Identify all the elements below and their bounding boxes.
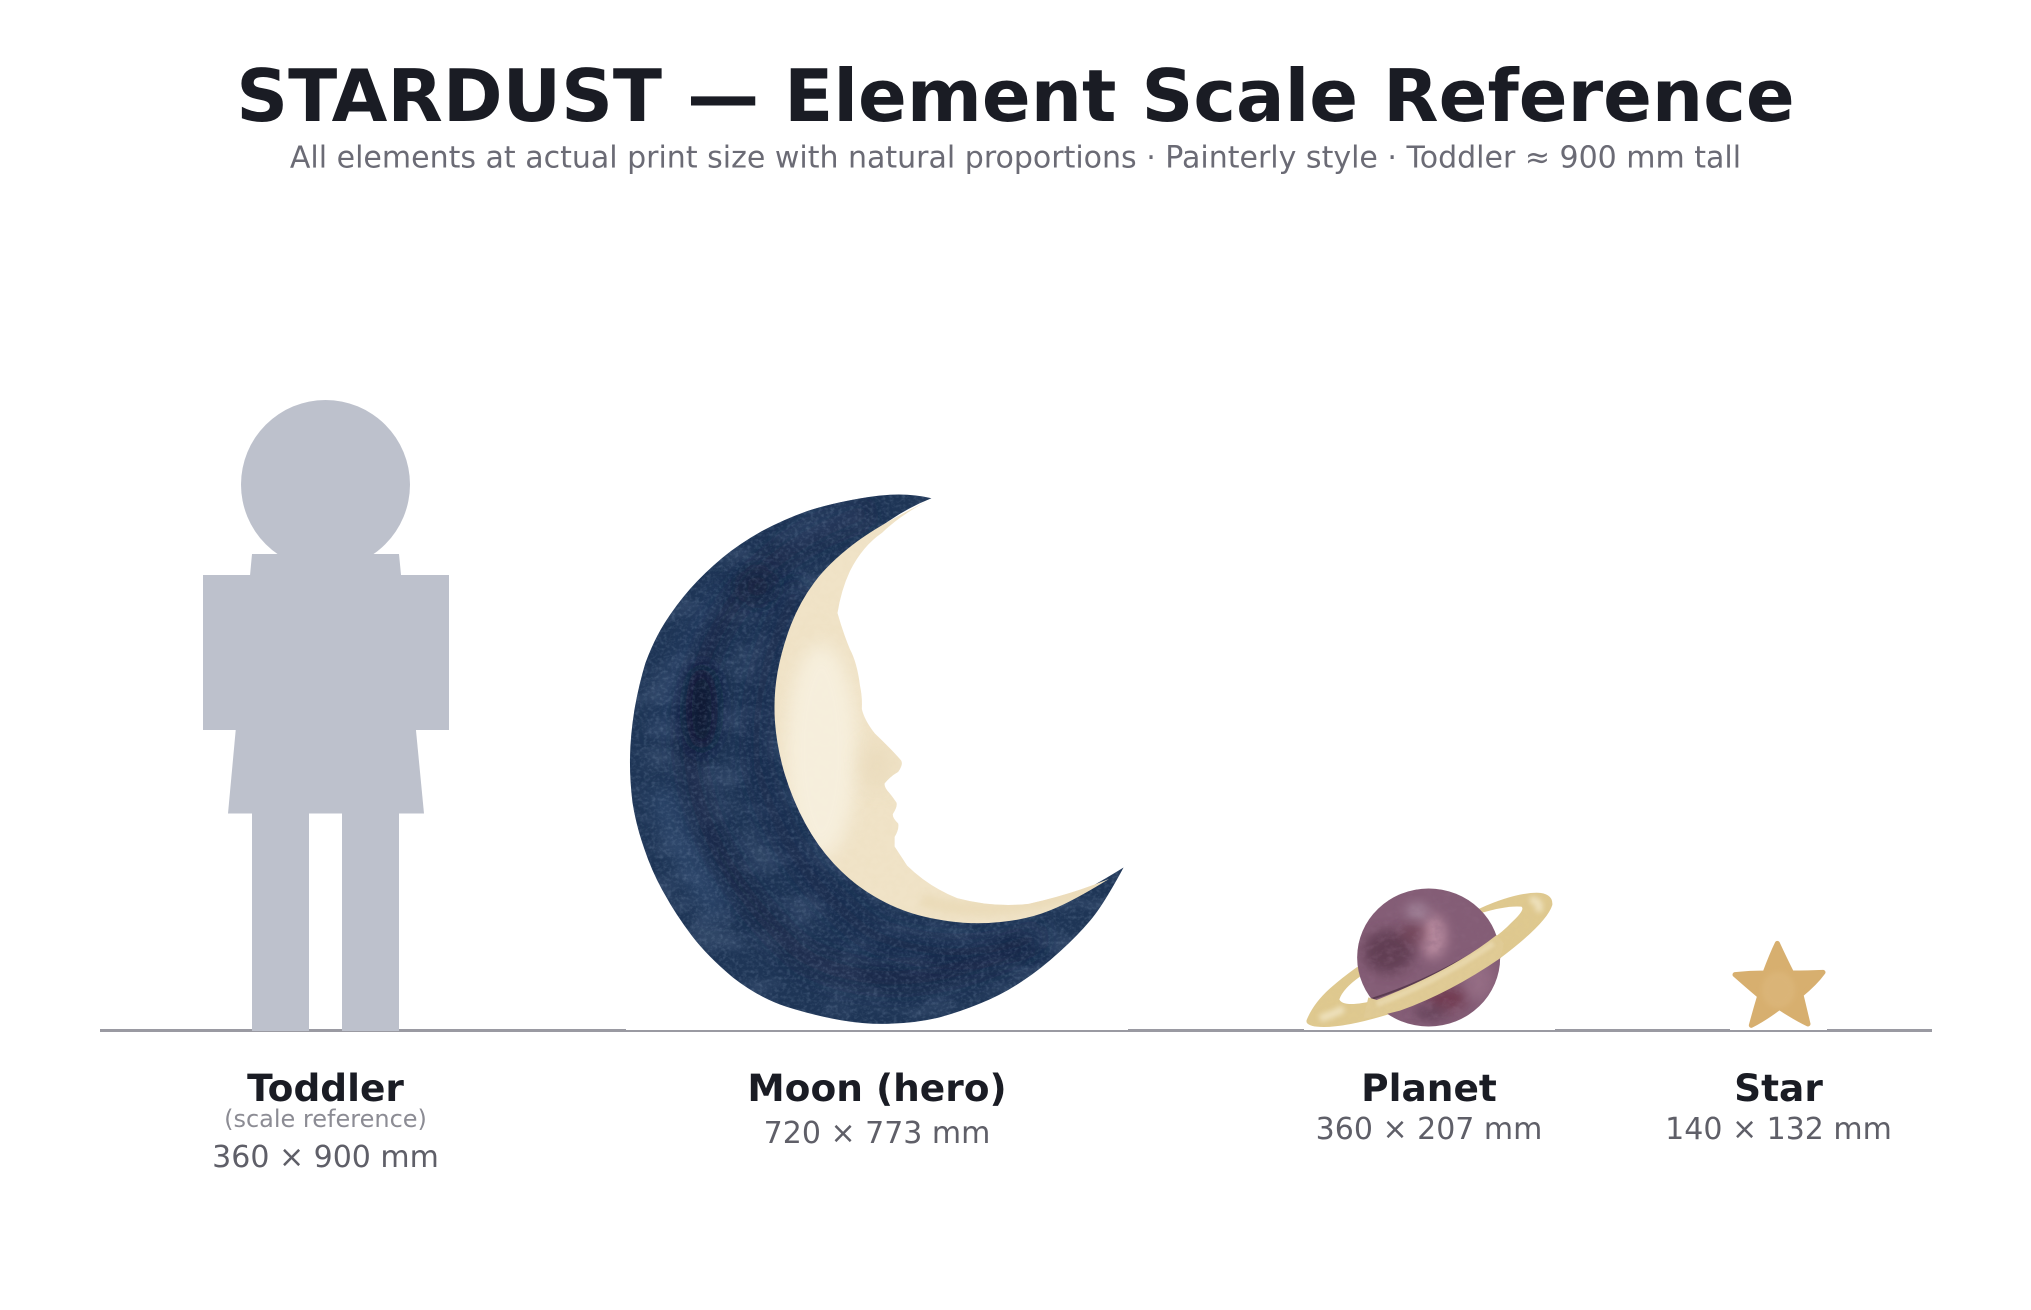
toddler right leg	[342, 800, 399, 1031]
toddler dimensions: 360 × 900 mm	[212, 1140, 439, 1175]
star dimensions: 140 × 132 mm	[1665, 1112, 1892, 1147]
planet dimensions: 360 × 207 mm	[1316, 1112, 1542, 1147]
moon dimensions: 720 × 773 mm	[764, 1116, 990, 1151]
moon illustration	[630, 494, 1124, 1024]
planet ring back	[1306, 892, 1552, 1027]
label: planet	[1316, 1066, 1542, 1147]
moon cream face	[774, 502, 1109, 924]
moon name: Moon (hero)	[747, 1066, 1007, 1110]
label: star	[1665, 1066, 1892, 1147]
toddler head	[241, 400, 410, 569]
ground line	[100, 1028, 1932, 1032]
label: toddler	[212, 1066, 439, 1175]
label: moon	[747, 1066, 1007, 1151]
planet sphere	[1353, 885, 1503, 1030]
planet ring front	[1367, 935, 1500, 1014]
toddler name: Toddler	[247, 1066, 404, 1110]
subtitle: All elements at actual print size with natural proportions · Painterly style · Toddler ≈ 900 mm tall	[290, 140, 1741, 176]
toddler arms	[203, 575, 449, 730]
toddler torso	[228, 554, 424, 814]
star illustration	[1735, 943, 1823, 1025]
toddler left leg	[252, 800, 309, 1031]
toddler note: (scale reference)	[224, 1105, 427, 1133]
title: STARDUST — Element Scale Reference	[236, 54, 1795, 138]
planet illustration	[1306, 888, 1552, 1027]
star name: Star	[1734, 1066, 1823, 1110]
toddler silhouette	[203, 400, 449, 1031]
moon navy crescent	[630, 494, 1124, 1024]
planet name: Planet	[1361, 1066, 1497, 1110]
